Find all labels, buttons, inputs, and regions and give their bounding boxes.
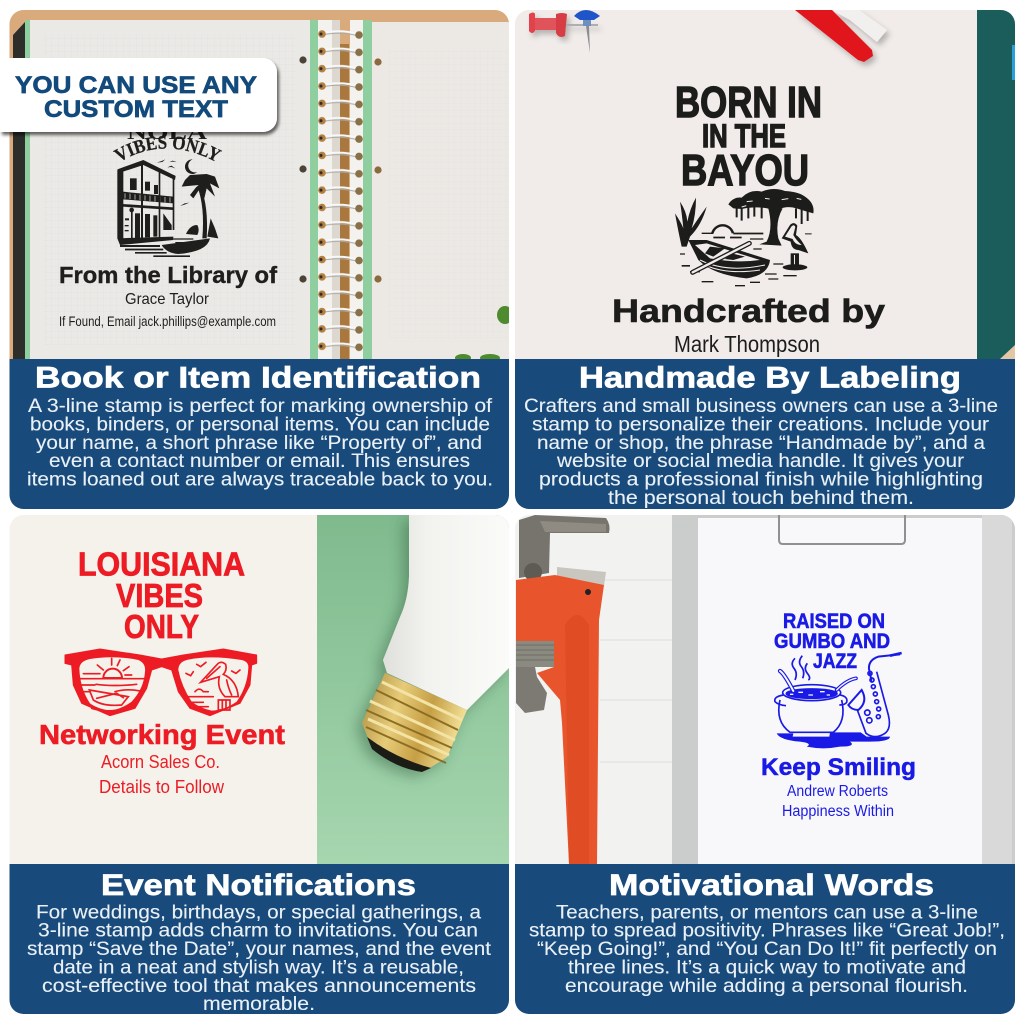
body text	[27, 396, 493, 490]
icon: light bulb	[362, 515, 510, 772]
stamp text lines: Keep Smiling	[761, 754, 916, 781]
heading: Book or Item Identification	[35, 362, 481, 394]
icon: red marker	[795, 10, 887, 62]
body text: website or social media handle. It gives your	[556, 451, 965, 472]
stamp: NOLA vibes only building: NOLA	[127, 122, 208, 144]
clipboard	[672, 515, 1015, 864]
stamp heading: IN THE	[702, 118, 786, 154]
stamp text lines: If Found, Email jack.phillips@example.com	[59, 314, 276, 329]
body text: Teachers, parents, or mentors can use a 3-line	[556, 902, 978, 923]
teal book edge	[977, 10, 1015, 359]
caption panel: event notifications	[10, 864, 509, 1015]
plant leaves	[455, 306, 509, 359]
body text: encourage while adding a personal flourish.	[565, 976, 968, 997]
panel: book or item identification photo	[10, 10, 509, 359]
body text	[27, 902, 492, 1015]
punched holes	[299, 56, 382, 283]
body text: your name, a short phrase like “Property of”, and	[36, 433, 482, 454]
body text: products a professional finish while highlighting	[539, 470, 983, 490]
body text	[524, 396, 998, 509]
body text: stamp to personalize their creations. Include your	[532, 414, 990, 436]
callout badge: you can use any custom text: YOU CAN USE ANY	[15, 72, 257, 99]
clipboard paper	[698, 518, 982, 864]
caption panel: handmade by labeling	[515, 359, 1015, 509]
stamp heading: BAYOU	[681, 146, 809, 195]
stamp heading: JAZZ	[813, 649, 857, 673]
clipboard clip	[779, 515, 905, 544]
body text: name or shop, the phrase “Handmade by”, and a	[537, 433, 985, 454]
stamp heading: LOUISIANA	[78, 546, 245, 584]
body text: date in a neat and stylish way. It’s a reusable,	[53, 957, 464, 978]
stamp heading: RAISED ON	[783, 609, 885, 633]
body text: stamp to spread positivity. Phrases like “Great Job!”,	[529, 921, 1005, 942]
stamp text lines: Acorn Sales Co.	[101, 751, 220, 772]
body text: the personal touch behind them.	[608, 488, 914, 509]
heading: Motivational Words	[609, 869, 934, 902]
wooden desk background	[9, 10, 509, 359]
body text: items loaned out are always traceable back to you.	[27, 470, 493, 490]
panel: event notifications photo	[9, 515, 510, 864]
stamp text lines	[612, 293, 885, 357]
stamp: sunglasses	[65, 649, 257, 716]
stamp heading	[676, 86, 820, 186]
stamp text lines	[40, 724, 285, 793]
stamp text lines: Handcrafted by	[612, 293, 885, 329]
stamp heading: ONLY	[124, 609, 199, 646]
stamp heading	[80, 552, 245, 639]
stamp: bayou boat and tree	[675, 189, 814, 286]
body text	[529, 902, 1005, 997]
stamp: NOLA vibes only building	[113, 132, 222, 257]
icon: pipe wrench	[516, 515, 610, 864]
icon: blue push pin	[574, 10, 600, 53]
body text: A 3-line stamp is perfect for marking ownership of	[28, 396, 493, 417]
body text: three lines. It’s a quick way to motivate and	[568, 957, 966, 978]
stamp heading: GUMBO AND	[774, 629, 890, 653]
white wood background	[515, 515, 673, 864]
icon: red push pin	[529, 12, 598, 37]
heading: Event Notifications	[101, 869, 416, 902]
stamp text lines: Details to Follow	[99, 776, 225, 797]
stamp text lines: Grace Taylor	[125, 291, 210, 308]
stamp text lines: From the Library of	[59, 262, 277, 288]
callout badge: you can use any custom text	[0, 58, 277, 132]
panel: handmade by labeling photo	[515, 10, 1015, 359]
caption panel: motivational words	[515, 864, 1015, 1014]
stamp text lines	[761, 754, 916, 820]
body text: “Keep Going!”, and “You Can Do It!” fit perfectly on	[537, 939, 997, 960]
body text: books, binders, or personal items. You can include	[30, 414, 490, 436]
stamp text lines: Mark Thompson	[674, 331, 820, 357]
notebook cover and left page	[13, 20, 310, 359]
body text: 3-line stamp adds charm to invitations. You can	[38, 921, 478, 942]
body text: even a contact number or email. This ensures	[49, 451, 470, 472]
caption panel: book or item identification	[10, 359, 509, 509]
stamp heading: VIBES	[116, 578, 203, 615]
callout badge: you can use any custom text: CUSTOM TEXT	[44, 96, 228, 123]
paper background	[515, 10, 977, 359]
body text: memorable.	[203, 994, 315, 1015]
green paper background	[317, 515, 509, 864]
body text: Crafters and small business owners can use a 3-line	[524, 396, 998, 417]
stamp text lines: Andrew Roberts	[787, 783, 888, 800]
body text: For weddings, birthdays, or special gatherings, a	[36, 902, 481, 923]
body text: stamp “Save the Date”, your names, and the event	[27, 939, 492, 960]
notebook right page	[372, 22, 509, 359]
stamp text lines: Happiness Within	[782, 803, 894, 820]
cream paper background	[9, 515, 317, 864]
stamp text lines	[59, 262, 277, 329]
heading: Handmade By Labeling	[579, 362, 961, 394]
notebook spiral binding	[310, 20, 372, 359]
stamp heading	[774, 613, 890, 668]
stamp heading: BORN IN	[675, 78, 822, 127]
body text: cost-effective tool that makes announcements	[42, 976, 476, 997]
stamp: NOLA vibes only building: VIBES ONLY	[113, 136, 222, 162]
stamp text lines: Networking Event	[39, 719, 285, 750]
panel: motivational words photo	[515, 515, 1015, 864]
stamp: gumbo pot and saxophone	[775, 653, 902, 748]
